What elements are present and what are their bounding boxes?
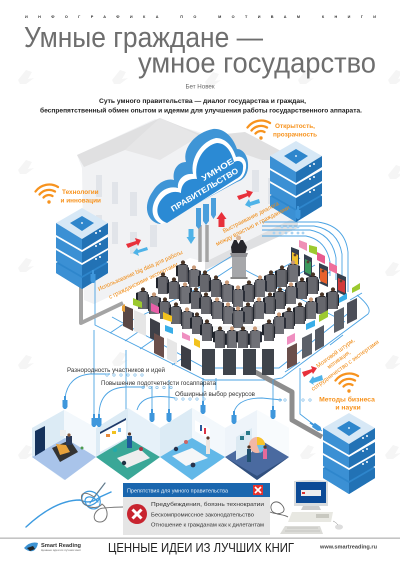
cloud: УМНОЕ [200,156,236,183]
panel heading: Препятствия для умного правительства [127,488,228,494]
lead paragraph [40,98,362,114]
title: умное государство [138,48,376,80]
display panels and speech bubbles right [291,240,346,296]
logo wordmark: Smart Reading [41,543,81,549]
cloud cables [196,198,216,262]
audience: first row [176,260,300,307]
footer slogan: ЦЕННЫЕ ИДЕИ ИЗ ЛУЧШИХ КНИГ [108,541,294,555]
label: technology [60,189,101,204]
floor wiring [95,256,369,384]
footer rule [0,537,400,540]
label: business methods [319,396,375,412]
room: accountability [96,408,160,480]
gray cables [81,272,322,437]
rotated caption: big data: с гражданскими экспертами [108,262,179,301]
close icon [253,485,263,495]
label: business methods: и науки [335,404,361,412]
room: data [225,410,289,480]
arrow: down [186,229,196,244]
footer url: www.smartreading.ru [319,544,378,550]
logo [24,543,81,552]
lead paragraph: беспрепятственный обмен опытом и идеями для улучшения работы государственного аппарата. [40,108,362,114]
server: left [56,208,108,289]
audience: front row [213,326,262,348]
author: Бет Новек [185,84,215,90]
rotated caption: big data: Использование big data для работы [97,250,184,293]
room plugs [62,396,276,427]
display panels front [122,283,360,375]
rotated caption: dialog: между властью и гражданами [215,205,291,248]
arrows: bottom right [302,366,323,385]
arrows: top right [237,190,260,208]
icon: cable loop [270,502,288,517]
cloud [147,129,248,224]
error icon [127,504,147,524]
label: openness: Открытость, [275,123,315,130]
panel header [123,483,270,497]
icon: tangled cable [26,483,123,527]
label: diversity: Разнородность участников и идей [67,367,165,374]
title: Умные граждане — [24,22,263,54]
audience: third row [136,287,339,341]
watermark pattern [18,70,400,459]
label: resources [175,391,311,401]
rotated caption: brainstorm: сотрудничество с экспертами [311,340,381,393]
title [24,22,376,80]
building [77,118,298,304]
cloud: ПРАВИТЕЛЬСТВО [169,166,240,214]
arrows: left [126,238,148,256]
obstacles list: Предубеждения, боязнь технократии [151,502,264,508]
speaker and podium [230,236,248,279]
icon: wifi left [36,185,58,204]
obstacles panel [123,483,270,535]
server: top right [270,141,322,222]
rotated caption: brainstorm: мотивация, [327,350,352,371]
label: business methods: Методы бизнеса [319,396,375,404]
back row desks [138,266,340,328]
icon: wifi bottom [336,374,358,393]
label: accountability: Повышение подотчетности госаппарата [101,380,217,387]
obstacles list: Отношение к гражданам как к дилетантам [151,522,264,528]
rotated caption: brainstorm: Мозговой штурм, [315,337,357,370]
top kicker: ИНФОГРАФИКА ПО МОТИВАМ КНИГИ [25,15,376,19]
server: bottom right [309,413,375,494]
label: technology: Технологии [62,189,99,196]
label: resources: Обширный выбор ресурсов [175,391,255,398]
arrow: up [216,212,226,227]
lead paragraph: Суть умного правительства — диалог государства и граждан, [99,98,306,105]
icon: computer [280,480,343,534]
obstacles list [151,502,264,528]
rotated caption: dialog: Выстраивание диалога [222,201,281,235]
room: diversity [32,410,96,480]
icon: wifi top [248,121,270,140]
logo tagline: Ценные идеи из лучших книг [41,548,81,552]
label: technology: и инновации [60,198,101,204]
obstacles list: Бескомпромиссное законодательство [151,512,254,518]
room: resources [160,408,225,480]
audience: second row [156,272,319,328]
server wiring [65,212,348,431]
label: openness: прозрачность [273,132,317,138]
dotted markers [273,226,304,234]
label: openness [273,123,317,138]
